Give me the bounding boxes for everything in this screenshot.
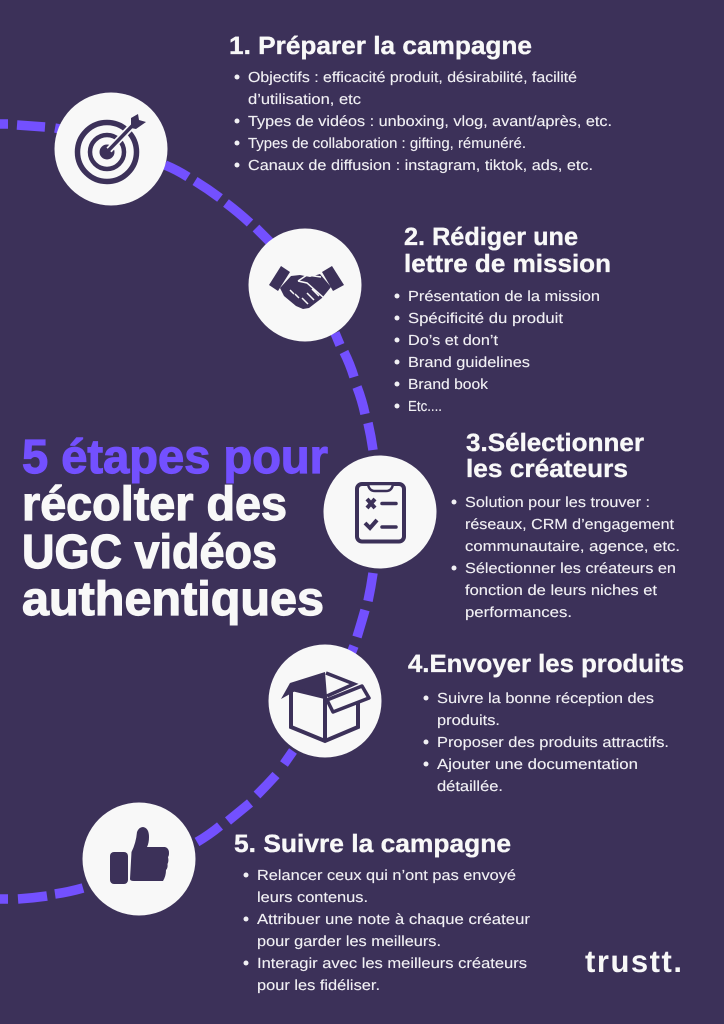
step 1 bullet list: Canaux de diffusion : instagram, tiktok, ads, etc. — [248, 158, 593, 174]
step 3 heading: 3.Sélectionner — [466, 429, 644, 457]
step 1 circle with target icon — [54, 92, 168, 206]
step 4 bullet list: produits. — [437, 713, 500, 729]
step 4 circle with box icon — [268, 644, 382, 758]
step 2 bullet list — [394, 289, 600, 415]
dashed curved path — [0, 124, 373, 899]
step 1 bullet list: Objectifs : efficacité produit, désirabilité, facilité — [248, 70, 577, 86]
step 2 bullet list: Brand guidelines — [408, 355, 530, 371]
step 2 bullet list: Brand book — [408, 377, 489, 393]
step 3 heading: les créateurs — [466, 455, 628, 483]
step 5 heading: 5. Suivre la campagne — [234, 830, 511, 858]
step 2 bullet list: Spécificité du produit — [408, 311, 563, 327]
step 5 bullet list: Interagir avec les meilleurs créateurs — [257, 956, 527, 972]
step 5 bullet list — [244, 868, 530, 994]
step 5 circle with thumbs-up icon — [82, 802, 196, 916]
step 3 bullet list: Sélectionner les créateurs en — [465, 561, 676, 577]
step 3 bullet list: performances. — [465, 605, 572, 621]
step 3 bullet list: réseaux, CRM d’engagement — [465, 517, 674, 533]
step 3 bullet list — [452, 495, 680, 621]
step 4 bullet list: Proposer des produits attractifs. — [437, 735, 669, 751]
step 5 bullet list: leurs contenus. — [257, 890, 368, 906]
step 3 bullet list: communautaire, agence, etc. — [465, 539, 680, 555]
step 4 bullet list: détaillée. — [437, 779, 503, 795]
step 4 bullet list: Ajouter une documentation — [437, 757, 638, 773]
step 3 circle with checklist icon — [324, 456, 436, 568]
step 4 bullet list — [424, 691, 669, 795]
step 5 bullet list: pour les fidéliser. — [257, 978, 380, 994]
step 2 heading: 2. Rédiger une — [404, 223, 578, 251]
main title — [22, 431, 328, 626]
step 2 bullet list: Etc.... — [408, 399, 442, 415]
step 2 heading — [404, 223, 611, 278]
step 3 bullet list: Solution pour les trouver : — [465, 495, 650, 511]
step 1 bullet list: Types de collaboration : gifting, rémunéré. — [248, 136, 526, 152]
step 2 bullet list: Présentation de la mission — [408, 289, 600, 305]
step 1 bullet list: d’utilisation, etc — [248, 92, 361, 108]
step 2 heading: lettre de mission — [404, 250, 611, 278]
step 1 bullet list: Types de vidéos : unboxing, vlog, avant/après, etc. — [248, 114, 612, 130]
step 5 bullet list: Attribuer une note à chaque créateur — [257, 912, 530, 928]
main title: authentiques — [22, 573, 324, 626]
main title: 5 étapes pour — [22, 431, 328, 484]
step 5 bullet list: pour garder les meilleurs. — [257, 934, 441, 950]
step 4 bullet list: Suivre la bonne réception des — [437, 691, 654, 707]
step 2 circle with handshake icon — [248, 228, 362, 342]
step 5 bullet list: Relancer ceux qui n’ont pas envoyé — [257, 868, 516, 884]
step 3 bullet list: fonction de leurs niches et — [465, 583, 657, 599]
step 3 heading — [466, 429, 644, 483]
step 4 heading: 4.Envoyer les produits — [408, 650, 684, 678]
trustt logo: trustt. — [585, 944, 682, 979]
main title: récolter des — [22, 478, 287, 531]
step 1 bullet list — [234, 70, 612, 174]
main title: UGC vidéos — [22, 526, 277, 579]
step 1 heading: 1. Préparer la campagne — [229, 32, 532, 60]
step 2 bullet list: Do’s et don’t — [408, 333, 498, 349]
